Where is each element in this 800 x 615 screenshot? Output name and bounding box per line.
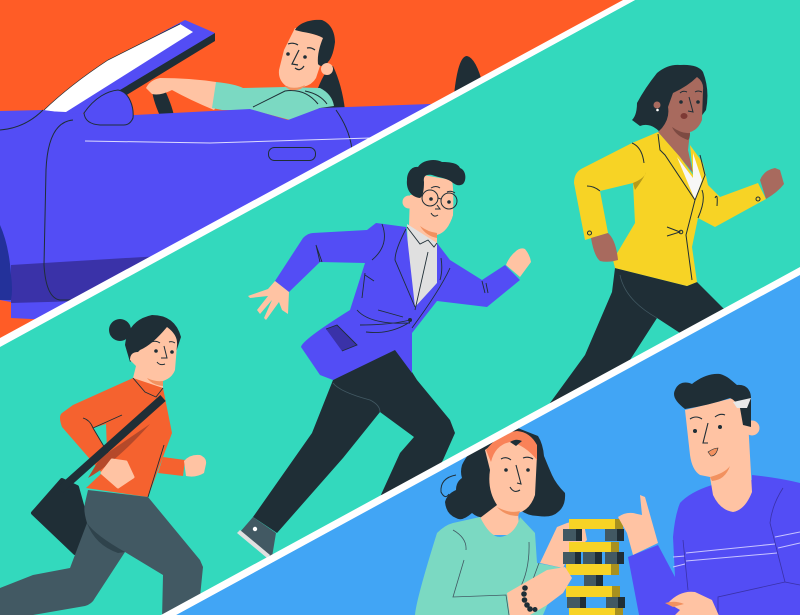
panel: blue background with jenga players <box>176 275 800 615</box>
woman in orange sweater with bag <box>0 315 206 615</box>
woman's hand and bracelet <box>507 567 572 615</box>
car body <box>0 104 432 320</box>
jenga tower <box>563 519 625 615</box>
icon: side mirror <box>84 90 133 125</box>
icon: windshield <box>43 20 215 120</box>
icon: rear seat headrest <box>454 56 481 92</box>
driver <box>146 20 345 120</box>
man in purple sweater <box>618 374 800 615</box>
man in purple blazer <box>237 160 531 558</box>
woman with curly hair <box>415 425 587 615</box>
woman in yellow jacket <box>540 65 784 420</box>
panel: orange background with car <box>0 0 623 338</box>
